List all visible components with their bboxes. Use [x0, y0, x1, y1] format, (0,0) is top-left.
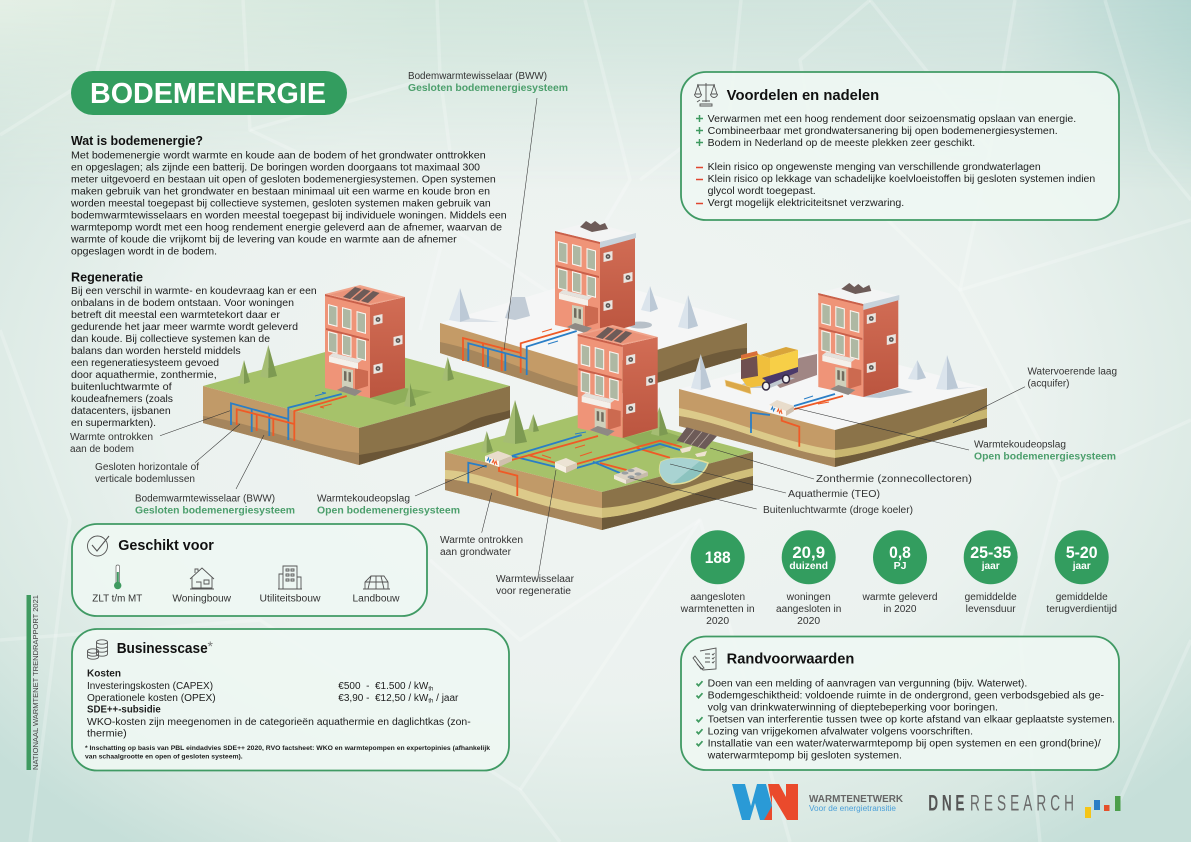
lijst met voorwaarden: volg van drinkwaterwinning of dieptebeperking voor boringen. — [708, 703, 998, 714]
stat: levensduur: 25-35 — [970, 543, 1011, 562]
nadelen — [696, 162, 1095, 209]
vinkjes — [696, 681, 702, 746]
vrachtwagen: strooiwagen — [725, 347, 798, 394]
kosten: €3,90 - €12,50 / kW — [338, 693, 428, 704]
labels: illustratie: Buitenluchtwarmte (droge koeler) — [763, 505, 913, 516]
text block: wat is bodemenergie: bodemwarmtewisselaars en worden meestal toegepast bij individuele woningen. Middels een — [71, 210, 507, 222]
nadelen: Vergt mogelijk elektriciteitsnet verzwaring. — [708, 198, 904, 209]
voordelen: Bodem in Nederland op de meeste plekken zeer geschikt. — [708, 138, 975, 149]
labels: illustratie: Open bodemenergiesysteem — [317, 506, 460, 516]
text block: wat is bodemenergie: meter uitgevoerd en bestaan uit open of gesloten bodemenergiesystemen. Open systemen — [71, 174, 496, 186]
nadelen: Klein risico op lekkage van schadelijke koelvloeistoffen bij gesloten systemen indien — [708, 174, 1095, 185]
kosten: €500 - €1.500 / kW — [338, 681, 428, 692]
voordelen — [696, 114, 1076, 149]
gebouw — [555, 221, 636, 335]
illustration: open systeem met regeneratie (voor) — [445, 325, 753, 530]
text block: regeneratie: dan koude. Bij collectieve systemen kan de — [71, 334, 270, 345]
leader lines — [160, 98, 1025, 577]
labels: illustratie: Warmtewisselaar — [496, 574, 575, 585]
panel: geschikt voor: Woningbouw — [172, 594, 232, 604]
kosten: th — [428, 686, 433, 692]
text block: regeneratie: datacenters, ijsbanen — [71, 406, 171, 417]
sde-subsidie — [87, 704, 471, 740]
stat: terugverdientijd: jaar — [1072, 560, 1091, 572]
icon: checklist — [693, 648, 716, 670]
icon: munten — [88, 640, 108, 659]
icon: weegschaal — [694, 83, 718, 106]
panel: randvoorwaarden — [681, 636, 1119, 770]
stat: terugverdientijd: gemiddelde — [1056, 592, 1108, 603]
panel: geschikt voor: Geschikt voor — [118, 538, 214, 554]
text block: wat is bodemenergie: warmtepomp wordt met een hoog rendement energie geleverd aan de afnemer, waarvan de — [70, 222, 502, 234]
labels: illustratie: Gesloten bodemenergiesysteem — [408, 83, 568, 94]
kosten: / jaar — [433, 693, 459, 704]
icon: thermometer — [114, 565, 121, 589]
stat: aangesloten warmtenetten: aangesloten — [690, 592, 745, 603]
bomen — [238, 345, 454, 407]
side label: rapportnaam: NATIONAAL WARMTENET TRENDRAPPORT 2021 — [31, 595, 40, 770]
labels: illustratie: Aquathermie (TEO) — [788, 489, 880, 500]
icon: kantoorgebouw — [278, 566, 302, 589]
leidingen — [463, 329, 577, 375]
gebouw — [818, 283, 899, 397]
stat: levensduur — [964, 530, 1018, 615]
labels: illustratie: Warmtekoudeopslag — [974, 440, 1066, 450]
labels: illustratie: Watervoerende laag — [1028, 366, 1117, 378]
text block: regeneratie: Regeneratie — [71, 270, 143, 284]
stat: woningen aangesloten: aangesloten in — [776, 604, 841, 615]
nadelen: Klein risico op ongewenste menging van verschillende grondwaterlagen — [708, 162, 1041, 173]
labels: illustratie: (acquifer) — [1028, 378, 1070, 390]
illustration: gesloten systeem in de sneeuw (achter) — [440, 221, 747, 402]
text block: regeneratie: en supermarkten). — [71, 418, 156, 429]
text block: regeneratie: gedurende het jaar meer warmte wordt geleverd — [71, 322, 298, 333]
stat: warmte geleverd — [861, 530, 938, 615]
stat: aangesloten warmtenetten: 188 — [705, 548, 731, 567]
panel: businesscase: * — [208, 638, 214, 654]
voetnoot: van schaalgrootte en open of gesloten systeem). — [85, 753, 243, 760]
logo: warmtenetwerk: WARMTENETWERK — [809, 794, 904, 805]
logo: dne research: RESEARCH — [970, 790, 1078, 816]
gebouw — [578, 325, 658, 438]
labels: illustratie: Zonthermie (zonnecollectoren) — [816, 474, 972, 485]
stat: woningen aangesloten: woningen — [786, 592, 831, 603]
stat: terugverdientijd: terugverdientijd — [1046, 604, 1117, 615]
logo: dne research — [928, 790, 1120, 818]
labels: illustratie: voor regeneratie — [496, 586, 571, 597]
labels: illustratie: Gesloten horizontale of — [95, 462, 199, 473]
title — [71, 71, 347, 115]
text block: wat is bodemenergie: Met bodemenergie wordt warmte en koude aan de bodem of het grondwater onttrokken — [71, 150, 486, 162]
text block: wat is bodemenergie: opgeslagen wordt in de bodem. — [71, 246, 217, 258]
panel: businesscase: Businesscase — [117, 641, 208, 657]
icon: vinkje — [88, 536, 109, 556]
sde-subsidie: WKO-kosten zijn meegenomen in de categorieën aquathermie en daglichtkas (zon- — [87, 717, 471, 728]
illustration: open systeem in de sneeuw (rechts) — [679, 283, 987, 467]
labels: illustratie: aan grondwater — [440, 547, 512, 558]
text block: regeneratie: koudeafnemers (zoals — [71, 394, 173, 405]
voetnoot — [85, 745, 490, 760]
panel: geschikt voor: Landbouw — [352, 594, 400, 604]
logo: warmtenetwerk — [732, 784, 904, 820]
labels: illustratie: aan de bodem — [70, 444, 134, 455]
panel: geschikt voor: ZLT t/m MT — [92, 594, 142, 604]
stat: aangesloten warmtenetten: 2020 — [706, 616, 730, 627]
vijver — [660, 458, 708, 484]
kosten — [87, 668, 459, 704]
gebouw — [325, 285, 405, 398]
kosten: Kosten — [87, 668, 121, 679]
warmtewisselaar en leidingen — [751, 394, 843, 447]
sneeuwkegels — [449, 286, 698, 329]
stat: warmte geleverd: PJ — [894, 560, 907, 572]
text block: regeneratie — [71, 270, 317, 429]
stat: warmte geleverd: warmte geleverd — [861, 592, 938, 603]
labels: illustratie: Warmtekoudeopslag — [317, 494, 410, 504]
voordelen: Verwarmen met een hoog rendement door seizoensmatig opslaan van energie. — [708, 114, 1076, 125]
panel: randvoorwaarden: Randvoorwaarden — [727, 651, 854, 667]
logo: dne research: DNE — [928, 790, 968, 816]
labels: illustratie: Warmte ontrokken — [440, 535, 523, 546]
kosten: Operationele kosten (OPEX) — [87, 693, 216, 704]
nadelen: glycol wordt toegepast. — [708, 186, 816, 197]
labels: illustratie: verticale bodemlussen — [95, 474, 195, 485]
stat: warmte geleverd: in 2020 — [884, 604, 917, 615]
panel: voordelen en nadelen — [681, 72, 1119, 220]
panel: geschikt voor — [72, 524, 427, 616]
text block: regeneratie: betreft dit meestal een warmtetekort daar er — [71, 310, 281, 321]
lijst met voorwaarden: Lozing van vrijgekomen afvalwater volgens voorschriften. — [708, 727, 973, 738]
icon: kas — [363, 576, 390, 589]
sde-subsidie: thermie) — [87, 729, 127, 740]
text block: wat is bodemenergie — [70, 134, 507, 258]
text block: wat is bodemenergie: Wat is bodemenergie? — [71, 134, 203, 148]
lijst met voorwaarden — [707, 679, 1115, 762]
panel: businesscase — [72, 629, 509, 770]
text block: wat is bodemenergie: warmte of koude die vrijkomt bij de levering van koude en warmte aan de afnemer — [70, 234, 457, 246]
stat: warmte geleverd: 0,8 — [889, 543, 911, 562]
text block: regeneratie: balans dan worden hersteld middels — [71, 346, 241, 357]
voordelen: Combineerbaar met grondwatersanering bij open bodemenergiesystemen. — [708, 126, 1058, 137]
illustration: gesloten systeem op groen land — [203, 285, 510, 465]
leidingen — [231, 392, 347, 441]
stat: woningen aangesloten: duizend — [789, 560, 828, 572]
labels: illustratie: Bodemwarmtewisselaar (BWW) — [408, 71, 547, 82]
title: BODEMENERGIE — [90, 78, 326, 110]
logo: warmtenetwerk: Voor de energietransitie — [809, 804, 897, 813]
leidingen — [468, 432, 682, 496]
stat: woningen aangesloten: 20,9 — [792, 543, 825, 562]
labels: illustratie: Warmte ontrokken — [70, 432, 153, 443]
stat: woningen aangesloten: 2020 — [797, 616, 821, 627]
side label: rapportnaam — [26, 595, 40, 770]
text block: wat is bodemenergie: en opgeslagen; als zijnde een batterij. De boringen worden doorgaans tot maximaal 300 — [71, 162, 480, 174]
text block: regeneratie: een regeneratiesysteem gevoed — [71, 358, 219, 369]
stat: levensduur: levensduur — [966, 604, 1016, 615]
stat: levensduur: gemiddelde — [965, 592, 1017, 603]
warmtewisselaar voor regeneratie — [555, 458, 577, 473]
warmtewisselaar — [485, 451, 512, 467]
text block: wat is bodemenergie: worden meestal toegepast bij collectieve systemen, gesloten systemen maken gebruik van — [70, 198, 491, 210]
lijst met voorwaarden: waterwarmtepomp bij gesloten systemen. — [707, 751, 902, 762]
lijst met voorwaarden: Installatie van een water/waterwarmtepomp bij open systemen en een grond(brine)/ — [708, 739, 1101, 750]
sneeuwkegels — [691, 354, 978, 390]
stat: aangesloten warmtenetten — [680, 530, 755, 627]
lijst met voorwaarden: Toetsen van interferentie tussen twee op korte afstand van elkaar geplaatste systemen. — [708, 715, 1115, 726]
lijst met voorwaarden: Bodemgeschiktheid: voldoende ruimte in de ondergrond, geen verbodsgebied als ge- — [708, 691, 1104, 702]
labels: illustratie: Open bodemenergiesysteem — [974, 452, 1116, 462]
bomen — [481, 400, 668, 453]
labels: illustratie: Gesloten bodemenergiesysteem — [135, 506, 295, 516]
panel: geschikt voor: Utiliteitsbouw — [260, 594, 321, 604]
sde-subsidie: SDE++-subsidie — [87, 704, 161, 716]
kosten: Investeringskosten (CAPEX) — [87, 681, 213, 692]
labels: illustratie — [70, 71, 1117, 597]
panel: voordelen en nadelen: Voordelen en nadelen — [727, 88, 879, 104]
text block: wat is bodemenergie: maken gebruik van het grondwater en bestaan minimaal uit een warme en koude bron en — [71, 186, 490, 198]
stat: terugverdientijd — [1046, 530, 1117, 615]
zonnecollectoren — [677, 427, 717, 457]
stat: terugverdientijd: 5-20 — [1066, 543, 1098, 562]
text block: regeneratie: Bij een verschil in warmte- en koudevraag kan er een — [71, 286, 317, 297]
kosten: th — [428, 698, 433, 704]
voetnoot: * Inschatting op basis van PBL eindadvies SDE++ 2020, RVO factsheet: WKO en warmtepompen en expertopinies (afhankelijk — [85, 745, 490, 752]
stat: aangesloten warmtenetten: warmtenetten in — [680, 604, 755, 615]
text block: regeneratie: onbalans in de bodem ontstaan. Voor woningen — [71, 298, 294, 309]
droge koeler — [614, 467, 648, 484]
text block: regeneratie: buitenluchtwarmte of — [71, 382, 172, 393]
labels: illustratie: Bodemwarmtewisselaar (BWW) — [135, 494, 275, 504]
stat: woningen aangesloten — [776, 530, 841, 627]
icon: huis — [190, 568, 214, 589]
text block: regeneratie: door aquathermie, zonthermie, — [71, 370, 217, 381]
lijst met voorwaarden: Doen van een melding of aanvragen van vergunning (bijv. Waterwet). — [708, 679, 1027, 690]
stat: levensduur: jaar — [981, 560, 1000, 572]
